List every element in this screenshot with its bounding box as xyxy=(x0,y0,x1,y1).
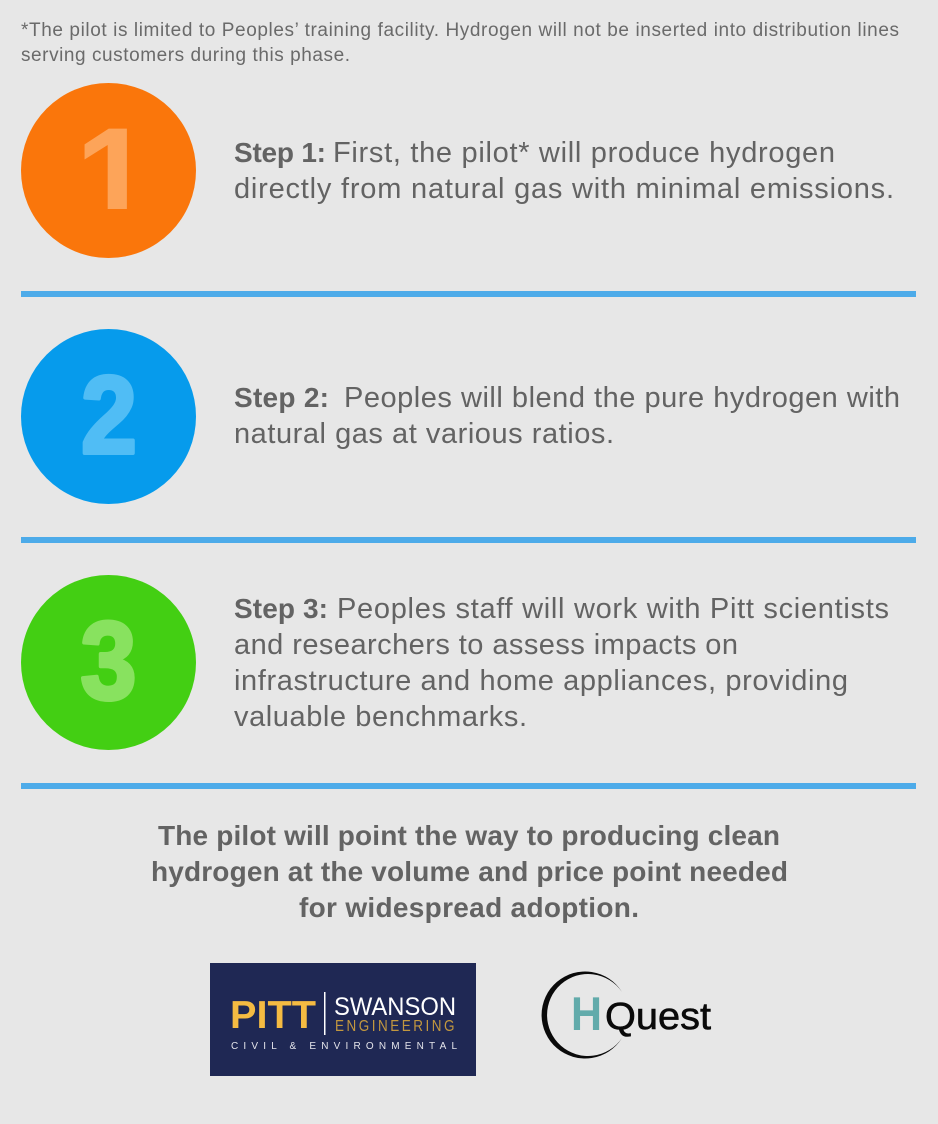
step 2 text: Step 2: xyxy=(234,382,329,413)
conclusion text: The pilot will point the way to producing clean xyxy=(158,820,780,851)
step 3 text: Step 3: xyxy=(234,593,328,624)
conclusion text xyxy=(151,820,788,923)
step 2 text: Peoples will blend the pure hydrogen with xyxy=(344,382,900,414)
footnote: *The pilot is limited to Peoples’ training facility. Hydrogen will not be inserted into distribution lines xyxy=(21,20,899,41)
logo: HQuest xyxy=(542,971,711,1058)
icon: step 3 circle xyxy=(21,575,196,750)
step 3 text: and researchers to assess impacts on xyxy=(234,629,738,661)
logo: HQuest: Quest xyxy=(605,996,711,1038)
logo: Pitt Swanson Engineering xyxy=(210,963,476,1076)
conclusion text: hydrogen at the volume and price point needed xyxy=(151,856,788,887)
step 3 text: Peoples staff will work with Pitt scientists xyxy=(337,593,889,625)
step 1 text: Step 1: xyxy=(234,137,326,168)
step 2 text xyxy=(234,382,900,450)
logo: Pitt Swanson Engineering: CIVIL & ENVIRONMENTAL xyxy=(231,1041,457,1052)
icon: step 2 circle: 2 xyxy=(81,354,137,477)
logo: Pitt Swanson Engineering: SWANSON xyxy=(334,993,456,1021)
step 3 text xyxy=(234,593,889,733)
step 1 text: First, the pilot* will produce hydrogen xyxy=(333,137,835,169)
icon: step 2 circle xyxy=(21,329,196,504)
step 2 text: natural gas at various ratios. xyxy=(234,418,614,450)
icon: step 1 circle: 1 xyxy=(75,98,153,255)
step 3 text: infrastructure and home appliances, providing xyxy=(234,665,848,697)
step 1 text: directly from natural gas with minimal emissions. xyxy=(234,173,894,205)
footnote: serving customers during this phase. xyxy=(21,45,350,66)
icon: step 3 circle: 3 xyxy=(80,600,136,723)
step 1 text xyxy=(234,137,894,205)
logo: Pitt Swanson Engineering: ENGINEERING xyxy=(335,1018,457,1035)
logo: HQuest: H xyxy=(571,987,602,1040)
step 3 text: valuable benchmarks. xyxy=(234,701,527,733)
conclusion text: for widespread adoption. xyxy=(299,892,639,923)
footnote xyxy=(21,20,899,66)
logo: Pitt Swanson Engineering: PITT xyxy=(230,994,316,1037)
icon: step 1 circle xyxy=(21,83,196,258)
